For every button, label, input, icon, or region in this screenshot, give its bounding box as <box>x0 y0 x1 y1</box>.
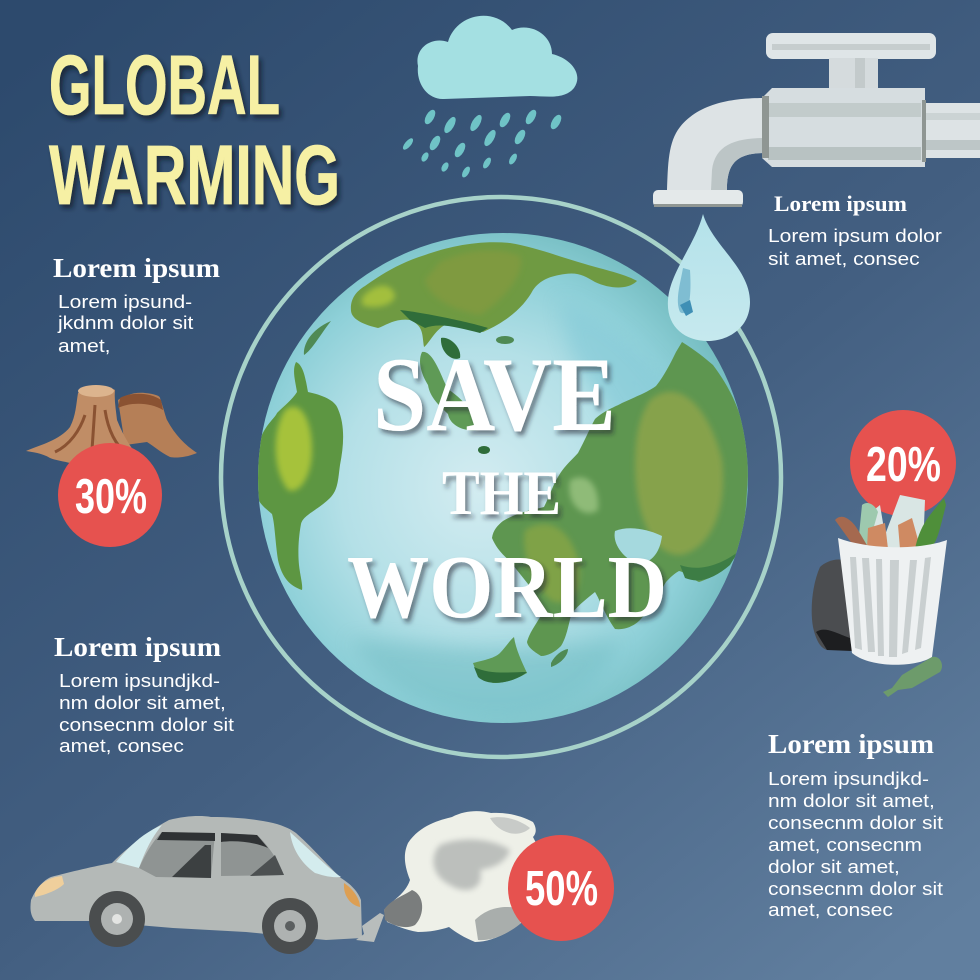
icon: trash can <box>812 495 947 697</box>
continent: Asia north <box>351 242 637 347</box>
text: upper left: jkdnm dolor sit <box>57 313 194 334</box>
badge: 50%: 50% <box>525 862 598 916</box>
text: lower left: nm dolor sit amet, <box>59 693 226 714</box>
ring around globe <box>221 197 781 757</box>
text: upper left: Lorem ipsum <box>53 253 221 283</box>
icon: exhaust smoke <box>384 811 550 942</box>
icon: water tap <box>653 33 980 207</box>
title: WARMING <box>49 128 340 222</box>
title <box>49 38 340 222</box>
title: GLOBAL <box>49 38 280 132</box>
text: lower right: consecnm dolor sit <box>768 813 944 834</box>
globe <box>256 233 748 723</box>
globe heading: SAVE <box>373 336 616 453</box>
text: lower left <box>54 632 235 757</box>
globe heading: THE <box>442 457 561 528</box>
continent: right landmass <box>492 342 748 656</box>
text: lower right: nm dolor sit amet, <box>768 791 935 812</box>
icon: rain cloud <box>401 16 577 179</box>
text: lower right: amet, consec <box>768 900 893 921</box>
text: upper left: Lorem ipsund- <box>58 292 192 313</box>
text: lower right: consecnm dolor sit <box>768 879 944 900</box>
text: lower left: amet, consec <box>59 736 184 757</box>
icon: tree stumps <box>26 385 197 468</box>
icon: car <box>30 816 384 954</box>
text: top right <box>768 191 942 270</box>
text: top right: Lorem ipsum dolor <box>768 226 942 247</box>
text: lower right: Lorem ipsum <box>768 729 935 759</box>
badge: 20% <box>850 410 956 516</box>
text: lower right: dolor sit amet, <box>768 857 900 878</box>
badge: 20%: 20% <box>866 438 941 492</box>
continent: peninsula and islands <box>420 336 514 454</box>
text: upper left <box>53 253 221 357</box>
globe heading: WORLD <box>347 538 667 637</box>
badge: 50% <box>508 835 614 941</box>
badge: 30%: 30% <box>75 470 147 524</box>
text: lower right: Lorem ipsundjkd- <box>768 769 929 790</box>
text: lower left: Lorem ipsum <box>54 632 222 662</box>
text: lower left: Lorem ipsundjkd- <box>59 671 220 692</box>
text: top right: sit amet, consec <box>768 249 920 270</box>
text: upper left: amet, <box>58 336 111 357</box>
text: lower right <box>768 729 944 921</box>
text: lower left: consecnm dolor sit <box>59 715 235 736</box>
text: top right: Lorem ipsum <box>774 191 907 216</box>
continent: south islands <box>473 637 568 683</box>
badge: 30% <box>58 443 162 547</box>
continent: left landmass <box>256 321 343 590</box>
globe heading <box>347 336 667 637</box>
icon: water drop <box>668 214 750 341</box>
text: lower right: amet, consecnm <box>768 835 922 856</box>
